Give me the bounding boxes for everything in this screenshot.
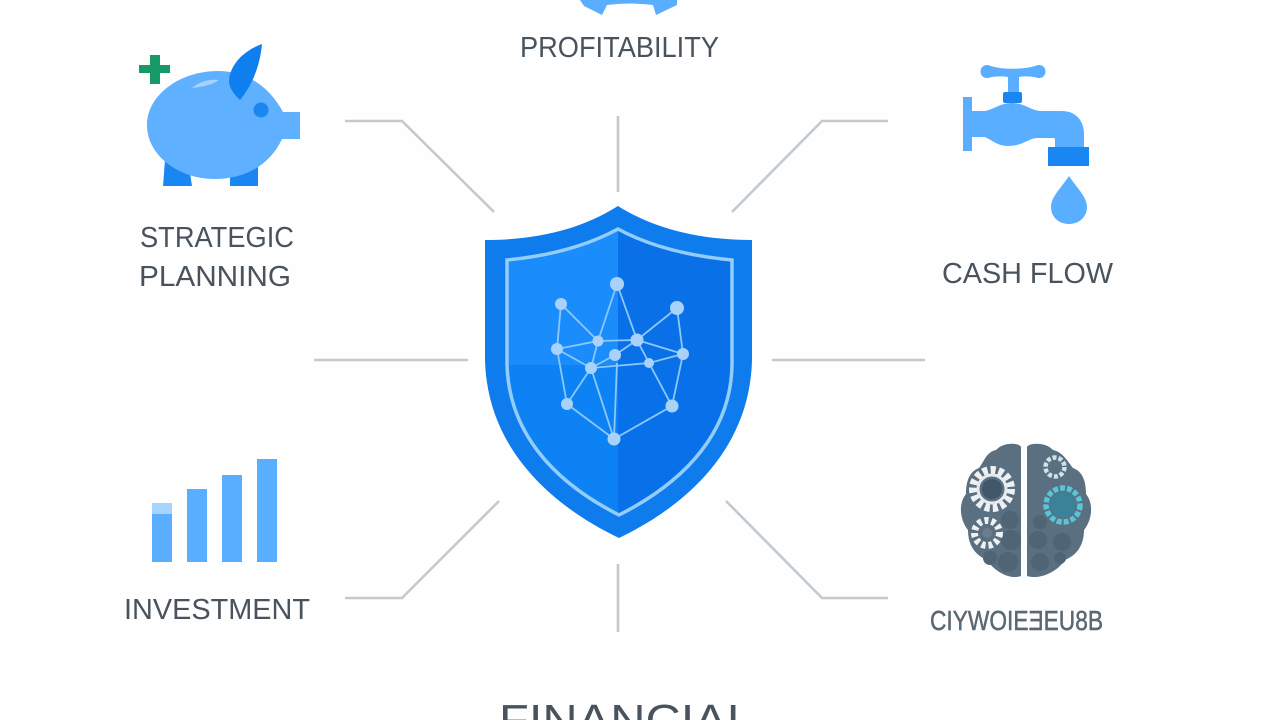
pig ear (229, 44, 262, 100)
icon: brain with gears (961, 444, 1091, 577)
connector lines (314, 116, 925, 632)
shield inner border (507, 229, 732, 515)
gear large right teal (1046, 488, 1080, 522)
shield outer (485, 206, 752, 538)
central shield (485, 206, 752, 538)
pig eye (254, 102, 268, 118)
brain left hemisphere (961, 444, 1021, 577)
label: profitability: PROFITABILITY (520, 32, 719, 64)
tap collar (1003, 92, 1022, 103)
gear small right (1046, 458, 1064, 476)
label: investment: INVESTMENT (124, 594, 310, 626)
tap body (972, 103, 1084, 148)
network nodes (551, 277, 689, 446)
icon: profitability gear (580, 0, 677, 15)
pig highlight (192, 80, 219, 88)
pig legs (163, 160, 258, 186)
icon: water tap (963, 65, 1089, 224)
icon: bar chart (152, 459, 277, 562)
tap handle (980, 65, 1046, 95)
pig body (147, 71, 300, 179)
label: cash flow: CASH FLOW (942, 258, 1114, 290)
gear small left (974, 520, 1000, 546)
label: strategic planning: PLANNING (139, 261, 291, 293)
shield inner quadrants (506, 229, 618, 365)
brain right hemisphere (1027, 444, 1091, 577)
network lines (557, 284, 683, 439)
label: strategic planning (139, 222, 294, 293)
tap nozzle (1048, 147, 1089, 166)
water drop (1051, 176, 1087, 224)
icon: piggy bank (139, 44, 300, 186)
icon: green plus (139, 55, 170, 84)
gear large left (973, 470, 1011, 508)
brain folds (983, 511, 1071, 572)
label: garbled brain caption: CIYWOIEƎEU8B (930, 605, 1103, 636)
label: strategic planning: STRATEGIC (140, 222, 294, 254)
tap flange (963, 97, 972, 151)
